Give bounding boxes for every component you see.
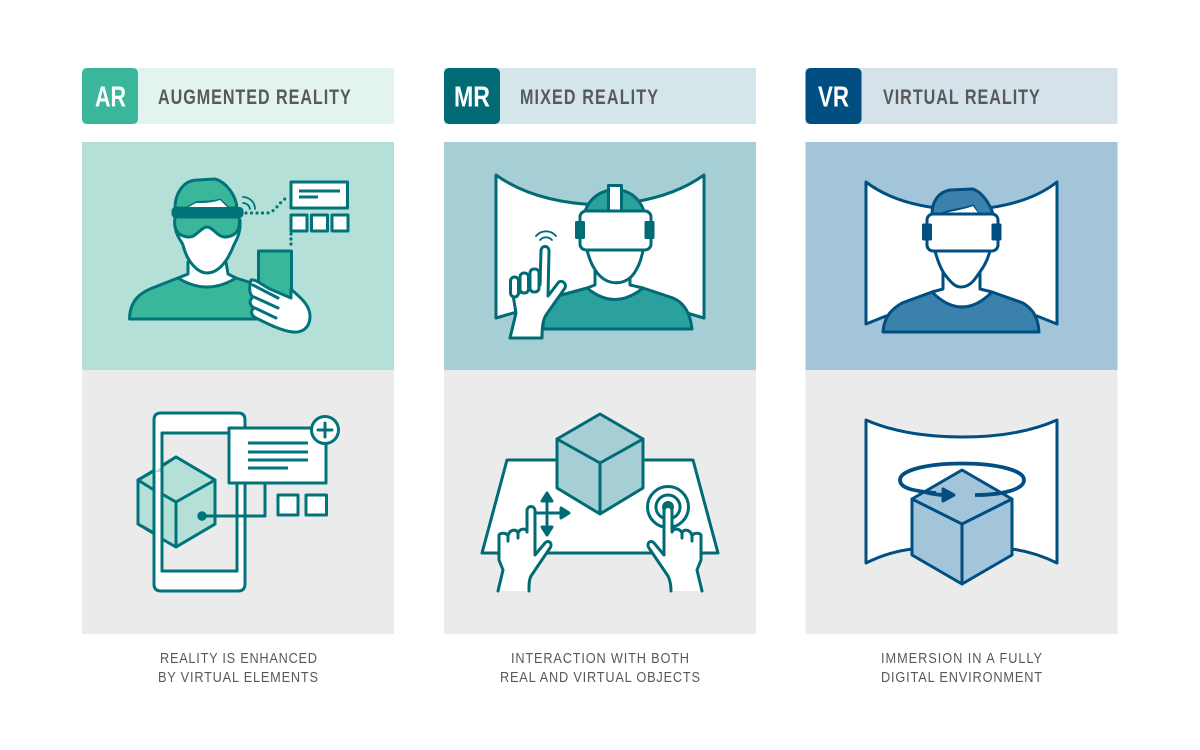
- header: VR: [806, 68, 1118, 124]
- caption: MR: REAL AND VIRTUAL OBJECTS: [500, 669, 700, 685]
- caption: VR: [881, 650, 1043, 685]
- header: AR: AR: [95, 82, 126, 114]
- panel: AR phone overlay with cube: [82, 370, 394, 634]
- column: augmented reality: [82, 68, 394, 685]
- header: AR: AUGMENTED REALITY: [158, 86, 351, 110]
- panel: VR person with headset: [806, 142, 1118, 370]
- caption: AR: [158, 650, 318, 685]
- caption: MR: INTERACTION WITH BOTH: [511, 650, 689, 666]
- icon: immersive screen with rotating cube: [866, 420, 1057, 584]
- header: AR: [82, 68, 394, 124]
- icon: phone with virtual cube: [138, 413, 338, 591]
- icon: VR person: [866, 182, 1057, 332]
- caption: VR: IMMERSION IN A FULLY: [881, 650, 1042, 666]
- panel: VR cube in immersive screen: [806, 370, 1118, 634]
- column: mixed reality: [444, 68, 756, 685]
- panel: MR person with headset and gesture: [444, 142, 756, 370]
- caption: AR: BY VIRTUAL ELEMENTS: [158, 669, 318, 685]
- panel: AR person with glasses and phone: [82, 142, 394, 370]
- caption: AR: REALITY IS ENHANCED: [160, 650, 317, 666]
- icon: table, cube and hands: [482, 414, 718, 591]
- header: MR: [444, 68, 756, 124]
- icon: AR person: [130, 179, 348, 332]
- header: VR: VR: [818, 82, 849, 114]
- header: MR: MR: [454, 82, 490, 114]
- icon: MR person: [496, 175, 704, 338]
- header: MR: MIXED REALITY: [520, 86, 658, 110]
- panel: MR hands with cube on table: [444, 370, 756, 634]
- caption: MR: [500, 650, 700, 685]
- caption: VR: DIGITAL ENVIRONMENT: [881, 669, 1043, 685]
- column: virtual reality: [806, 68, 1118, 685]
- header: VR: VIRTUAL REALITY: [883, 86, 1040, 110]
